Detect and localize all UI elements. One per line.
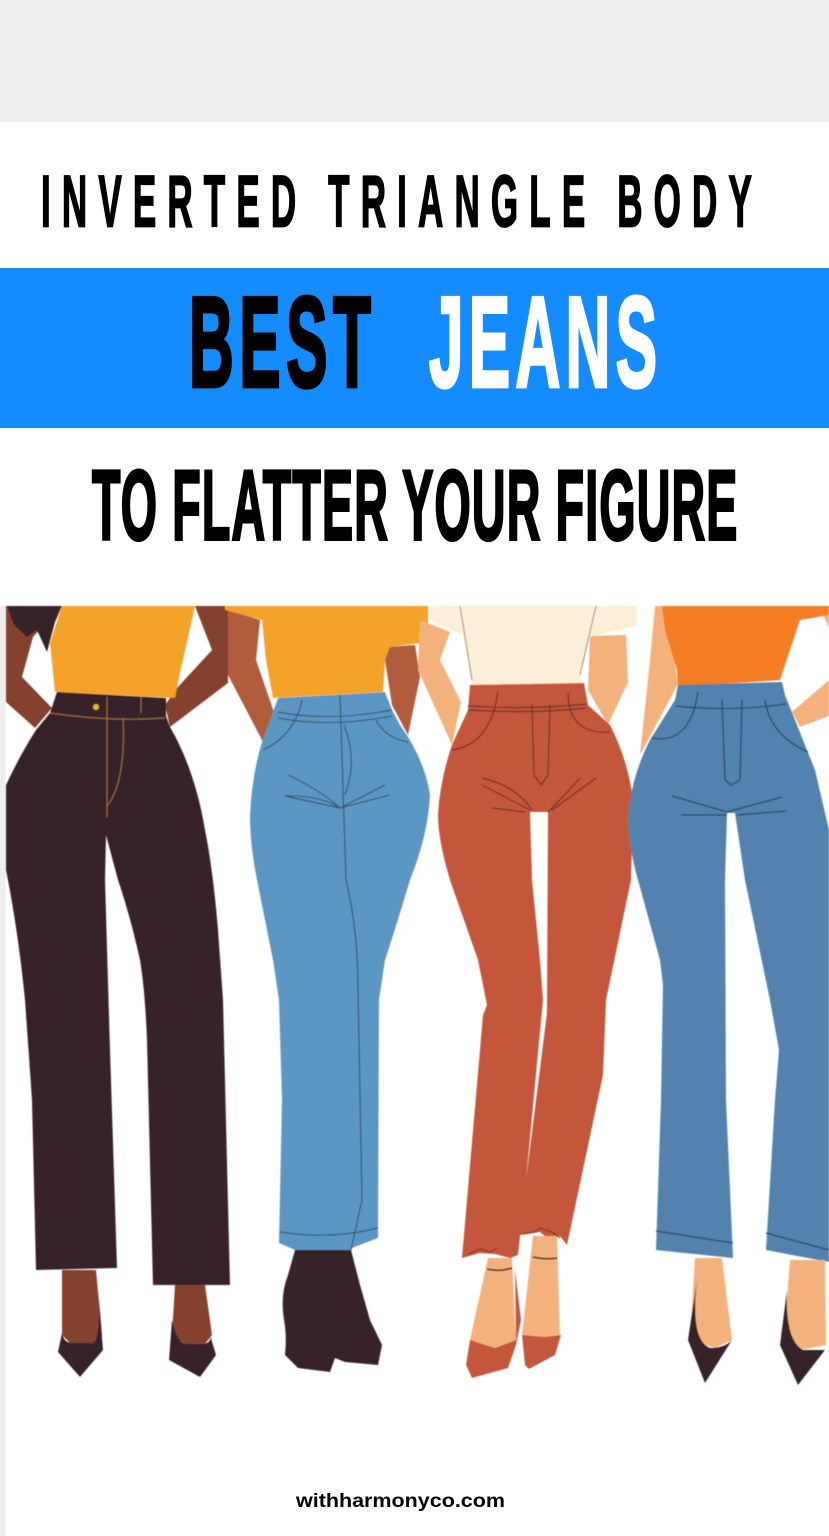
frayed hem — [468, 1228, 560, 1254]
arms — [640, 606, 829, 755]
title word: jeans: JEANS — [429, 270, 657, 415]
title: best jeans — [189, 270, 657, 415]
left shoe — [466, 1270, 521, 1378]
tee seams — [460, 606, 596, 680]
feet — [62, 1270, 212, 1344]
top grey band — [0, 0, 829, 122]
right foot — [522, 1236, 560, 1337]
jeans stitching — [652, 692, 829, 1250]
arms — [6, 606, 228, 728]
right shoe — [522, 1335, 561, 1369]
figure 1: black trousers — [6, 606, 230, 1377]
arms — [228, 610, 420, 742]
jeans stitching — [452, 692, 610, 812]
tee — [430, 606, 637, 688]
blue title band — [0, 268, 829, 428]
title word: best: BEST — [189, 270, 371, 415]
ankle straps — [487, 1257, 557, 1270]
jeans — [438, 683, 633, 1258]
jeans — [250, 692, 430, 1251]
trouser stitching — [50, 697, 165, 817]
shoes — [688, 1280, 825, 1385]
jeans stitching — [263, 695, 408, 1250]
shoes — [58, 1300, 216, 1377]
trousers — [6, 692, 230, 1285]
left grey edge strip — [0, 606, 6, 1536]
footer website: withharmonyco.com — [295, 1490, 505, 1512]
arms — [418, 620, 628, 745]
illustration: four women in jeans — [6, 606, 829, 1385]
shirt — [662, 606, 829, 687]
figure 2: light blue jeans — [225, 606, 430, 1372]
figure 4: denim blue jeans — [628, 606, 829, 1385]
shirt — [225, 606, 428, 698]
boots — [283, 1250, 382, 1372]
heading: inverted triangle body: INVERTED TRIANGLE BODY — [41, 161, 752, 243]
button — [93, 704, 99, 710]
subheading: to flatter your figure: TO FLATTER YOUR FIGURE — [92, 451, 737, 561]
shirt — [50, 606, 195, 698]
figure 3: rust jeans — [418, 606, 637, 1378]
hair — [7, 606, 62, 652]
jeans — [628, 682, 829, 1262]
left foot — [470, 1258, 516, 1348]
feet — [690, 1258, 826, 1350]
